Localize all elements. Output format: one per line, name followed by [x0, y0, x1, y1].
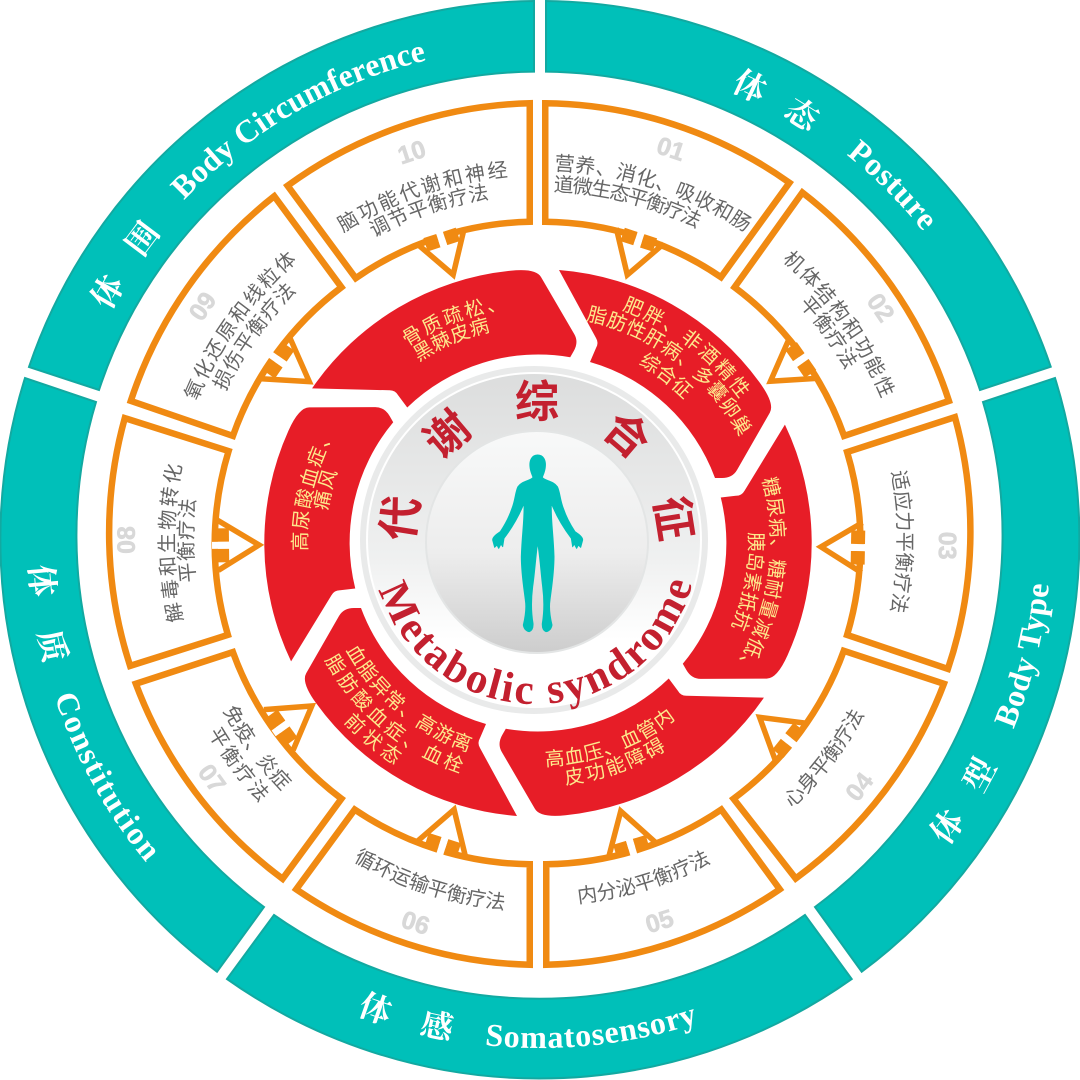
red segment: 骨质疏松: 骨质疏松、 [402, 298, 494, 346]
red segment: 高血压: 高血压、血管内 [546, 709, 674, 768]
outer band: 体质 Constitution [0, 376, 266, 974]
text 09: 氧化还原和线粒体 [183, 252, 295, 400]
label: 体围 Body Circumference: 体 [78, 265, 134, 316]
red segment: 骨质疏松 [312, 270, 576, 408]
outer band: 体感 Somatosensory [226, 914, 854, 1080]
red segment: 血脂异常: 前状态 [344, 713, 402, 765]
number 03: 03 [933, 532, 961, 560]
red segment: 血脂异常 [304, 608, 517, 816]
therapy box 06 [292, 804, 533, 968]
therapy box 07 [132, 648, 346, 884]
label: 体态 Posture: Posture [847, 138, 932, 230]
red segment: 高尿酸: 高尿酸血症、 [290, 442, 330, 550]
text 02: 机体结构和功能性 [784, 250, 895, 398]
red segment: 高尿酸: 痛风 [313, 470, 338, 510]
label: 体感 Somatosensory: Somatosensory [486, 1009, 694, 1048]
therapy box 01 [542, 100, 794, 282]
therapy box 01: 道微生态平衡疗法 [554, 174, 701, 229]
arrow 08 [212, 520, 259, 570]
inner disc [426, 431, 648, 653]
arrow 07 [259, 686, 326, 754]
number 08: 08 [113, 526, 141, 554]
number 09: 09 [183, 287, 222, 326]
red segment: 糖尿病: 胰岛素抵抗 [731, 532, 766, 632]
red segment: 肥胖 [559, 270, 772, 478]
arrow 09 [256, 334, 324, 402]
label: 体态 Posture: 体 [727, 57, 775, 112]
red segment: 骨质疏松: 黑棘皮病 [413, 317, 489, 362]
red segment: 糖尿病: 糖尿病、糖耐量减低、 [740, 476, 787, 660]
text 10: 脑功能代谢和神经 [336, 160, 508, 234]
red segment: 血脂异常: 脂肪酸血症、血栓 [324, 653, 463, 774]
arrow 06 [416, 802, 478, 862]
title: 代谢综合征: 合 [592, 393, 667, 471]
arrow 05 [597, 804, 658, 863]
text 03: 适应力平衡疗法 [890, 470, 914, 612]
red segment: 糖尿病 [682, 424, 812, 679]
label: 体质 Constitution: 质 [28, 625, 80, 666]
title: 代谢综合征: 征 [642, 491, 712, 545]
text 06: 循环运输平衡疗法 [355, 848, 504, 911]
therapy box 10 [283, 100, 533, 283]
red segment: 肥胖: 肥胖、非酒精性 [622, 296, 750, 399]
therapy box 02 [730, 188, 953, 440]
outer band: 体围 Body Circumference [28, 0, 535, 392]
label: 体态 Posture: 态 [777, 85, 831, 142]
label: 体态 Posture [727, 57, 932, 230]
red segment: 肥胖: 综合征 [639, 352, 694, 400]
number 06: 06 [398, 906, 433, 941]
label: 体围 Body Circumference [78, 47, 426, 316]
title: 代谢综合征: 谢 [408, 393, 483, 470]
arrow 01 [604, 222, 666, 283]
text 01: 营养、消化、吸收和肠 [556, 154, 752, 232]
human figure icon [493, 455, 583, 632]
text 05: 内分泌平衡疗法 [578, 850, 711, 904]
label: 体感 Somatosensory: 体 [354, 980, 399, 1034]
text 08: 解毒和生物转化 [157, 464, 184, 622]
therapy box 04 [729, 646, 948, 883]
number 10: 10 [394, 135, 429, 170]
outer band: 体型 Body Type [814, 376, 1080, 974]
red segment: 肥胖: 脂肪性肝病、多囊卵巢 [586, 305, 752, 436]
label: 体型 Body Type: 型 [950, 749, 1006, 799]
center disc [360, 366, 712, 714]
therapy box 07: 平衡疗法 [211, 726, 268, 803]
therapy box 08 [106, 414, 264, 670]
arrow 03 [821, 522, 868, 573]
red segment: 高尿酸 [264, 407, 394, 662]
therapy box 08: 平衡疗法 [176, 500, 197, 582]
number 01: 01 [653, 132, 688, 167]
title: 代谢综合征: 代 [362, 491, 432, 545]
text 04: 心身平衡疗法 [786, 709, 864, 806]
label: 体质 Constitution [20, 562, 156, 862]
arrow 02 [756, 334, 823, 402]
red segment: 血脂异常: 血脂异常、高游离 [346, 646, 472, 752]
label: 体感 Somatosensory: 感 [417, 998, 460, 1051]
arrow 10 [415, 222, 477, 282]
number 04: 04 [840, 767, 879, 807]
label: 体围 Body Circumference: Body Circumference [169, 47, 426, 200]
therapy box 03 [816, 413, 974, 673]
red segment: 高血压 [500, 678, 764, 816]
therapy box 10: 调节平衡疗法 [368, 183, 488, 237]
label: 体围 Body Circumference: 围 [113, 211, 169, 264]
arrow 04 [744, 698, 812, 766]
title: Metabolic syndrome: Metabolic syndrome [378, 578, 692, 710]
label: 体型 Body Type: 体 [918, 799, 974, 852]
therapy box 05 [543, 805, 784, 968]
title: 代谢综合征: 综 [515, 366, 559, 430]
red segment: 高血压: 皮功能障碍 [566, 736, 664, 786]
label: 体质 Constitution: 体 [20, 562, 68, 598]
therapy box 02: 平衡疗法 [804, 295, 858, 370]
title: 代谢综合征 [362, 366, 712, 545]
label: 体质 Constitution: Constitution [57, 694, 156, 862]
label: 体型 Body Type: Body Type [994, 584, 1053, 729]
text 07: 免疫、炎症 [222, 706, 292, 792]
number 07: 07 [192, 759, 231, 798]
number 02: 02 [861, 288, 900, 327]
number 05: 05 [642, 904, 677, 939]
label: 体感 Somatosensory [354, 980, 694, 1051]
label: 体型 Body Type [918, 584, 1053, 852]
therapy box 09: 损伤平衡疗法 [212, 284, 296, 391]
outer band: 体态 Posture [545, 0, 1052, 392]
therapy box 09 [126, 192, 346, 440]
